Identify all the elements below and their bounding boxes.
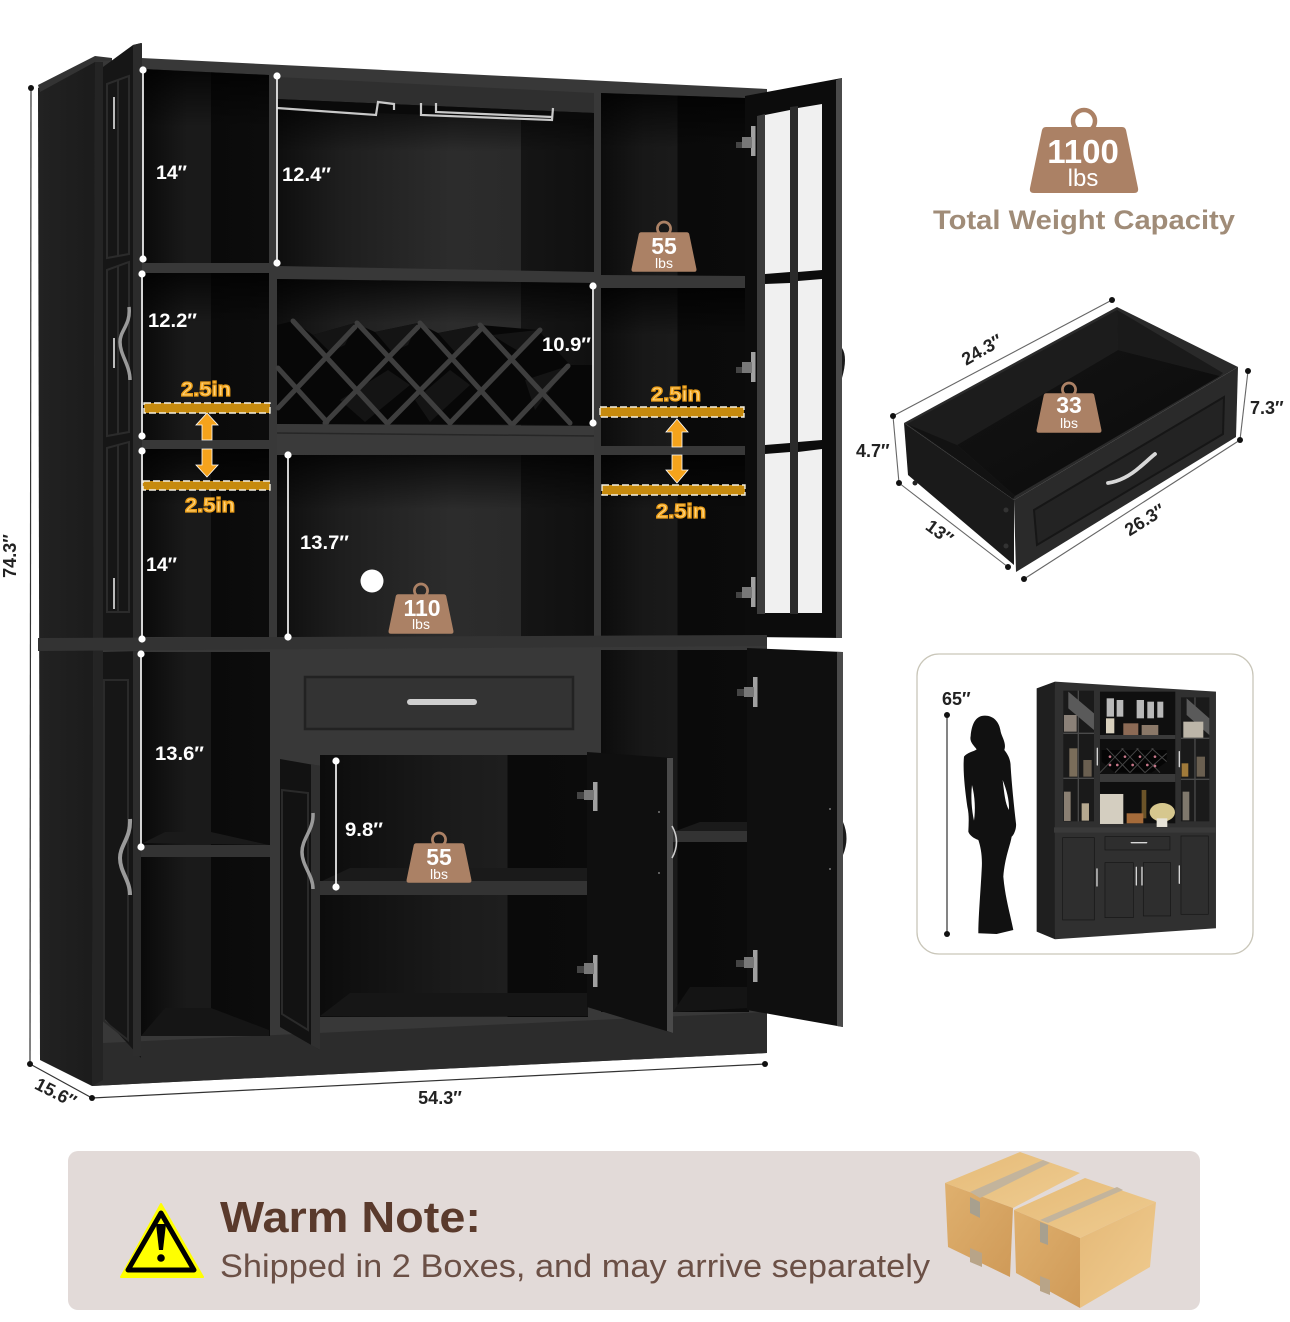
warm note heading: Warm Note:: [220, 1193, 481, 1242]
size comparison panel: [917, 654, 1253, 954]
drawer dimension labels: 4.7″: [856, 441, 890, 461]
weight badge: 110 lbs: lbs: [412, 616, 430, 632]
warning triangle icon: [121, 1204, 203, 1277]
upper door outer handle: [842, 348, 845, 378]
upper glass doors: [1063, 691, 1209, 821]
weight badge: 55 lbs lower shelf: [406, 833, 472, 883]
depth label: 15.6″: [32, 1074, 80, 1112]
interior white dimension markers: [137, 66, 597, 891]
drawer dimension labels: 26.3″: [1121, 500, 1169, 540]
adjustable shelf indicator: right column: 2.5in: [656, 501, 706, 523]
upper left glass door: [103, 43, 142, 640]
height label 65 in: 65″: [942, 689, 971, 709]
drawer dimension labels: 13″: [922, 516, 957, 549]
center shelves: [1100, 692, 1175, 827]
wine rack bottom shelf: [277, 424, 594, 455]
adjustable shelf indicator: left column: 2.5in: [185, 495, 235, 517]
drawer diagram: [904, 307, 1238, 572]
lower left door handle: [120, 819, 130, 895]
mini cabinet photo: [1037, 682, 1216, 939]
weight badge: 33 lbs: lbs: [1060, 415, 1078, 431]
lower right compartment: [601, 650, 749, 1012]
drawer right wall: [1117, 310, 1223, 376]
drawer front: [1014, 367, 1238, 572]
interior dimension labels: 13.6″: [155, 744, 204, 765]
cardboard boxes icon: [945, 1152, 1156, 1308]
right lower door: [736, 648, 846, 1027]
warm note body: Shipped in 2 Boxes, and may arrive separately: [220, 1248, 930, 1284]
interior dimension labels: 13.7″: [300, 533, 349, 554]
weight badge: 110 lbs: [388, 584, 454, 634]
drawer near-left wall: [907, 424, 1015, 499]
drawer dimension labels: [856, 330, 1284, 549]
adjustable shelf indicator: right column: 2.5in: [651, 384, 701, 406]
center left door handle: [302, 813, 313, 889]
drawer front recess: [1034, 397, 1224, 545]
stemware rails: [277, 102, 553, 120]
interior dimension labels: [146, 163, 591, 841]
adjustable shelf indicator: right column: [600, 384, 745, 523]
total weight capacity caption: Total Weight Capacity: [933, 205, 1235, 235]
total weight capacity badge: lbs: [1068, 165, 1098, 192]
upper right glass door: [745, 78, 842, 638]
peeking handle: [672, 826, 676, 858]
side screws and wheel: [912, 480, 1008, 548]
width label: 54.3″: [418, 1088, 462, 1108]
overall dimension lines: [27, 85, 768, 1101]
drawer back wall: [907, 310, 1118, 445]
interior dimension labels: 14″: [146, 555, 177, 576]
interior dimension labels: 9.8″: [345, 820, 383, 841]
drawer dimension labels: 7.3″: [1250, 398, 1284, 418]
interior dimension labels: 12.2″: [148, 311, 197, 332]
drawer handle: [1108, 454, 1155, 483]
upper left door handle: [120, 307, 130, 380]
drawer dimension lines: [890, 297, 1251, 582]
cabinet top edge: [38, 56, 112, 92]
lower center compartment: [320, 755, 588, 1017]
woman silhouette: [964, 716, 1016, 934]
cabinet plinth: [92, 1012, 767, 1086]
weight badge: 55 lbs upper shelf: 55: [651, 233, 677, 259]
cabinet front frame: [92, 58, 767, 1086]
height marker: [944, 712, 950, 937]
divider band between upper and lower units: [38, 635, 767, 651]
weight badge: 33 lbs: [1036, 383, 1102, 433]
center right door: [577, 752, 676, 1033]
cabinet illustration: [38, 43, 846, 1086]
lower left door: [103, 651, 141, 1058]
center left door: [280, 759, 320, 1050]
interior dimension labels: 14″: [156, 163, 187, 184]
cabinet left side panel: [38, 57, 112, 1086]
interior dimension labels: 10.9″: [542, 335, 591, 356]
weight badge: 55 lbs lower shelf: 55: [426, 844, 452, 870]
lower doors: [1054, 748, 1216, 920]
weight badge: 55 lbs upper shelf: lbs: [655, 255, 673, 271]
drawer floor: [957, 350, 1220, 496]
drawer rim: [904, 307, 1238, 500]
height label: 74.3″: [0, 534, 20, 578]
back box: [945, 1152, 1080, 1277]
drawer: [280, 649, 601, 755]
door hinges: [736, 126, 756, 607]
cord hole: [360, 570, 384, 592]
adjustable shelf indicator: left column: [143, 379, 270, 517]
total weight capacity badge: 1100: [1047, 133, 1119, 170]
interior dimension labels: 12.4″: [282, 165, 331, 186]
drawer left side: [904, 423, 1014, 565]
front box: [1014, 1178, 1156, 1308]
shelf highlight: [277, 433, 594, 436]
adjustable shelf indicator: left column: 2.5in: [181, 379, 231, 401]
warm note banner: [68, 1151, 1200, 1310]
stemware rack header: [277, 77, 594, 113]
upper cabinet compartments: [143, 69, 745, 637]
side front strip: [92, 62, 103, 1086]
stemware rack shadow: [277, 99, 594, 120]
drawer handle: [410, 699, 474, 705]
weight badge: 55 lbs upper shelf: [632, 222, 696, 272]
wine rack lattice: [277, 321, 594, 425]
drawer dimension labels: 24.3″: [958, 330, 1006, 369]
weight badge: 55 lbs lower shelf: lbs: [430, 866, 448, 882]
weight badge: 33 lbs: 33: [1056, 392, 1082, 418]
weight badge: 110 lbs: 110: [403, 595, 441, 621]
total weight capacity badge: [1030, 110, 1138, 193]
outer handle: [843, 822, 846, 855]
lower left compartment: [141, 652, 270, 1036]
